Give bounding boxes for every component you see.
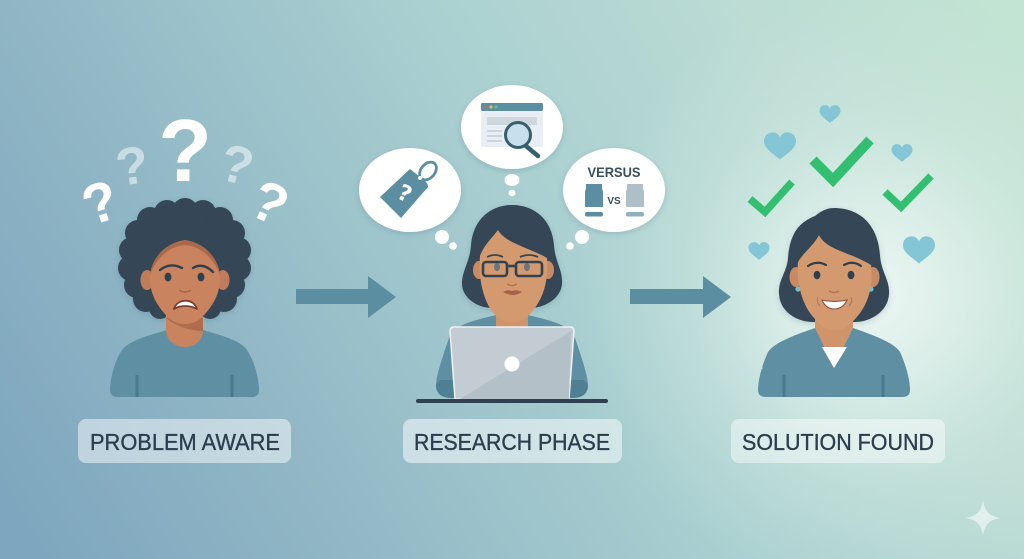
floating hearts bbox=[748, 105, 935, 264]
neck and collar bbox=[815, 318, 853, 367]
arrow: research to solution bbox=[630, 276, 731, 318]
icon: sparkle watermark bbox=[966, 500, 1000, 536]
label: research phase bbox=[403, 419, 622, 463]
label: problem aware bbox=[78, 419, 291, 463]
glasses bbox=[483, 262, 542, 276]
ears and earrings bbox=[790, 267, 880, 292]
torso bbox=[436, 315, 588, 398]
label: research phase: RESEARCH PHASE bbox=[414, 429, 610, 455]
torso bbox=[758, 328, 910, 397]
ears bbox=[140, 270, 154, 290]
smiling face bbox=[798, 235, 872, 330]
question marks: ? bbox=[241, 167, 299, 238]
green check marks bbox=[750, 140, 931, 212]
ears bbox=[473, 261, 485, 279]
neck bbox=[496, 305, 528, 330]
thought bubble: price tag bbox=[359, 148, 461, 250]
neck bbox=[166, 310, 203, 347]
question marks: ? bbox=[112, 135, 152, 198]
hair bbox=[779, 208, 889, 322]
question marks: ? bbox=[74, 167, 126, 238]
figure: researching person with laptop bbox=[416, 205, 608, 403]
icon: left bottle bbox=[585, 184, 603, 216]
thought bubble: versus comparison bbox=[563, 148, 665, 250]
figure: happy person bbox=[748, 105, 935, 397]
thought bubble: versus comparison: VS bbox=[607, 196, 621, 207]
thought bubble: web search bbox=[461, 85, 563, 196]
icon: right bottle bbox=[626, 184, 644, 216]
question marks bbox=[74, 101, 299, 238]
desk line bbox=[416, 399, 608, 403]
arrow: problem to research bbox=[296, 276, 396, 318]
face bbox=[480, 230, 547, 322]
label: problem aware: PROBLEM AWARE bbox=[90, 429, 280, 455]
curly hair bbox=[118, 198, 251, 319]
question marks: ? bbox=[214, 133, 259, 198]
laptop bbox=[450, 327, 574, 399]
torso bbox=[110, 330, 259, 397]
label: solution found bbox=[731, 419, 945, 463]
icon: price tag with question mark: ? bbox=[393, 180, 415, 208]
sad face bbox=[150, 240, 220, 324]
label: solution found: SOLUTION FOUND bbox=[742, 429, 934, 455]
question marks: ? bbox=[158, 101, 212, 200]
hair bbox=[462, 205, 562, 308]
thought bubble: versus comparison: VERSUS bbox=[588, 164, 640, 180]
icon: browser window and magnifier bbox=[481, 103, 543, 156]
figure: problem aware person bbox=[74, 101, 299, 397]
